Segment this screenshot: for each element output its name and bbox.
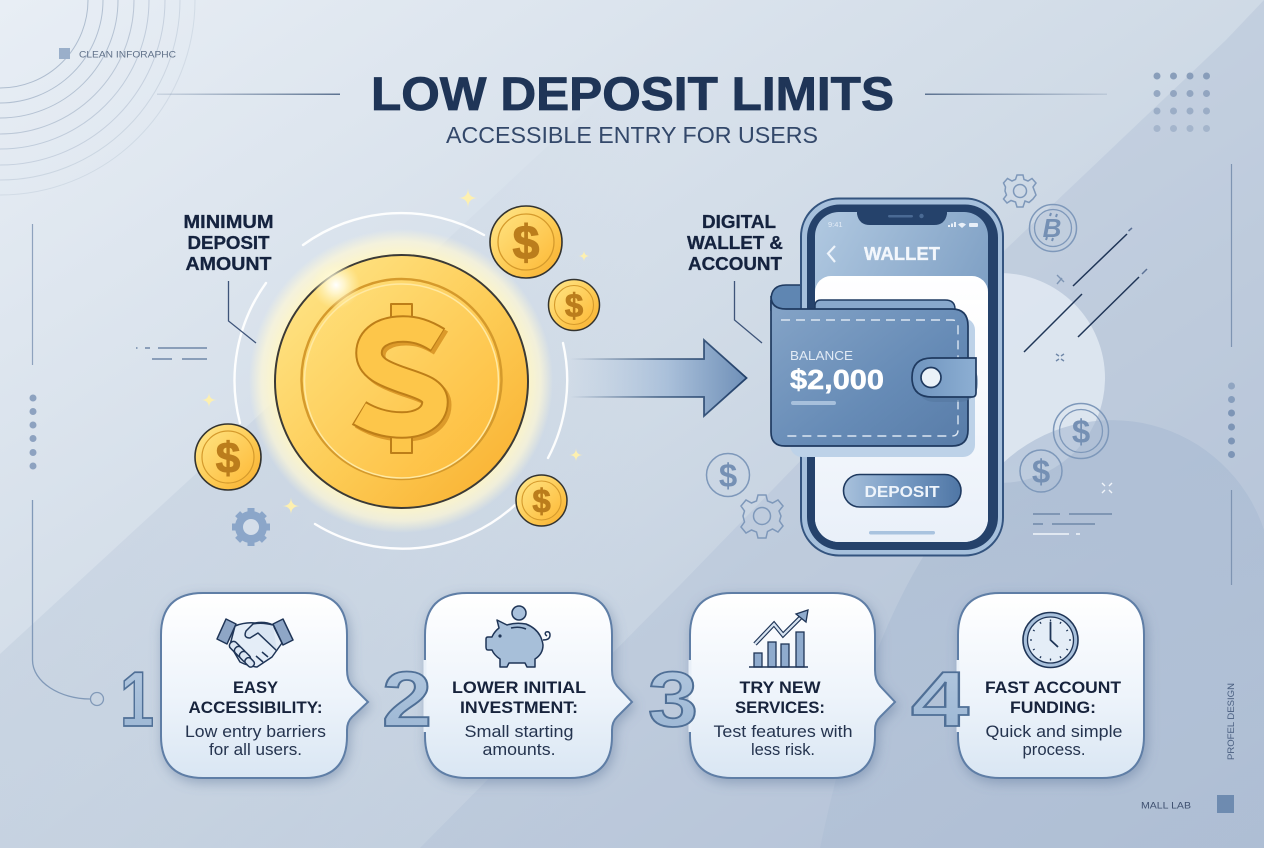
top-left tag: CLEAN INFORAPHC bbox=[79, 50, 176, 60]
label: minimum deposit amount: MINIMUM bbox=[184, 212, 274, 232]
small coin bottom bbox=[516, 475, 567, 526]
label: minimum deposit amount: AMOUNT bbox=[186, 254, 272, 274]
gear outline top right bbox=[1004, 175, 1036, 207]
wallet: $2,000 bbox=[790, 364, 884, 395]
label: minimum deposit amount: DEPOSIT bbox=[188, 233, 270, 253]
sparkle marks bbox=[1056, 275, 1112, 493]
card 3: try new services bbox=[690, 593, 895, 778]
small coin left bbox=[195, 424, 261, 490]
bottom-right tag bbox=[1141, 795, 1234, 813]
small coin right: $ bbox=[565, 287, 583, 324]
number 2: 2 bbox=[382, 655, 432, 743]
dot grid bbox=[1154, 72, 1210, 132]
top-left tag bbox=[59, 48, 176, 60]
text: easy accessibility: EASY bbox=[233, 678, 279, 697]
label: digital wallet and account bbox=[687, 212, 783, 343]
label: digital wallet and account: ACCOUNT bbox=[688, 254, 782, 274]
text: lower initial investment: INVESTMENT: bbox=[460, 698, 578, 717]
diagonal lines bbox=[1024, 228, 1147, 352]
text: try new services: TRY NEW bbox=[740, 678, 821, 697]
wallet bbox=[771, 296, 978, 457]
title rule right bbox=[925, 94, 1107, 95]
title rule left bbox=[157, 94, 340, 95]
text: lower initial investment: Small starting bbox=[464, 723, 574, 741]
left side rail bbox=[30, 224, 104, 706]
dollar coin icon left: $ bbox=[719, 457, 737, 494]
phone bbox=[801, 198, 1003, 556]
phone: WALLET bbox=[864, 243, 941, 264]
orbit rings bbox=[235, 213, 567, 549]
small dash lines left bbox=[136, 348, 207, 359]
icon: growth chart bbox=[749, 610, 808, 667]
wallet screen panel bbox=[815, 276, 988, 542]
phone: 9:41 bbox=[828, 220, 843, 229]
card 1: easy accessibility bbox=[161, 593, 368, 778]
dollar coin icon large bbox=[1054, 404, 1108, 458]
text: fast account funding: process. bbox=[1022, 741, 1086, 759]
icon: clock bbox=[1023, 612, 1078, 668]
decorative concentric arcs bbox=[0, 0, 195, 195]
dollar coin icon small right bbox=[1020, 450, 1062, 492]
text: fast account funding: FAST ACCOUNT bbox=[985, 678, 1122, 697]
number 1: 1 bbox=[120, 655, 154, 743]
text: easy accessibility: ACCESSIBILITY: bbox=[188, 698, 322, 717]
label: digital wallet and account: WALLET & bbox=[687, 233, 783, 253]
icon: handshake bbox=[217, 619, 293, 668]
gear outline bottom bbox=[741, 495, 783, 538]
deposit button: DEPOSIT bbox=[864, 484, 940, 501]
card 2: lower initial investment bbox=[425, 593, 632, 778]
arrow bbox=[570, 340, 746, 416]
text: fast account funding bbox=[985, 678, 1122, 759]
icon: piggy bank bbox=[486, 606, 550, 667]
text: try new services: Test features with bbox=[714, 723, 852, 741]
small coin right bbox=[548, 280, 600, 330]
text: lower initial investment: LOWER INITIAL bbox=[452, 678, 586, 697]
text: try new services: less risk. bbox=[751, 741, 815, 759]
icon: dollar sign bbox=[359, 304, 441, 453]
vertical tag: PROFEL DESIGN bbox=[1226, 683, 1237, 760]
text: easy accessibility: Low entry barriers bbox=[185, 723, 326, 741]
bitcoin icon: B bbox=[1043, 213, 1061, 243]
sparkles bbox=[201, 188, 590, 515]
wallet roll behind phone bbox=[771, 285, 803, 310]
text: lower initial investment: amounts. bbox=[482, 741, 556, 759]
small coin top: $ bbox=[513, 217, 540, 270]
small dash lines right bbox=[1033, 514, 1112, 534]
number 3: 3 bbox=[648, 655, 698, 743]
small coin top bbox=[490, 206, 562, 278]
deposit button bbox=[844, 474, 961, 507]
main coin bbox=[249, 229, 553, 533]
bitcoin icon bbox=[1030, 204, 1076, 252]
title: LOW DEPOSIT LIMITS bbox=[371, 67, 894, 120]
subtitle: ACCESSIBLE ENTRY FOR USERS bbox=[446, 122, 818, 148]
small coin left: $ bbox=[216, 434, 240, 483]
dollar coin icon left bbox=[706, 454, 750, 496]
text: lower initial investment bbox=[452, 678, 586, 759]
bottom-right tag: MALL LAB bbox=[1141, 800, 1191, 812]
label: minimum deposit amount bbox=[184, 212, 274, 343]
dollar coin icon small right: $ bbox=[1032, 453, 1050, 490]
small coin bottom: $ bbox=[532, 482, 551, 520]
text: fast account funding: Quick and simple bbox=[986, 723, 1122, 741]
text: try new services: SERVICES: bbox=[735, 698, 825, 717]
dollar coin icon large: $ bbox=[1072, 413, 1090, 450]
text: fast account funding: FUNDING: bbox=[1010, 698, 1096, 717]
text: try new services bbox=[714, 678, 852, 759]
card 4: fast account funding bbox=[958, 593, 1144, 778]
label: digital wallet and account: DIGITAL bbox=[702, 212, 776, 232]
number 4: 4 bbox=[911, 655, 969, 743]
wallet: BALANCE bbox=[790, 349, 853, 363]
text: easy accessibility: for all users. bbox=[209, 741, 302, 759]
gear icon filled bbox=[232, 508, 270, 546]
text: easy accessibility bbox=[185, 678, 326, 759]
right side rail bbox=[1228, 164, 1235, 585]
